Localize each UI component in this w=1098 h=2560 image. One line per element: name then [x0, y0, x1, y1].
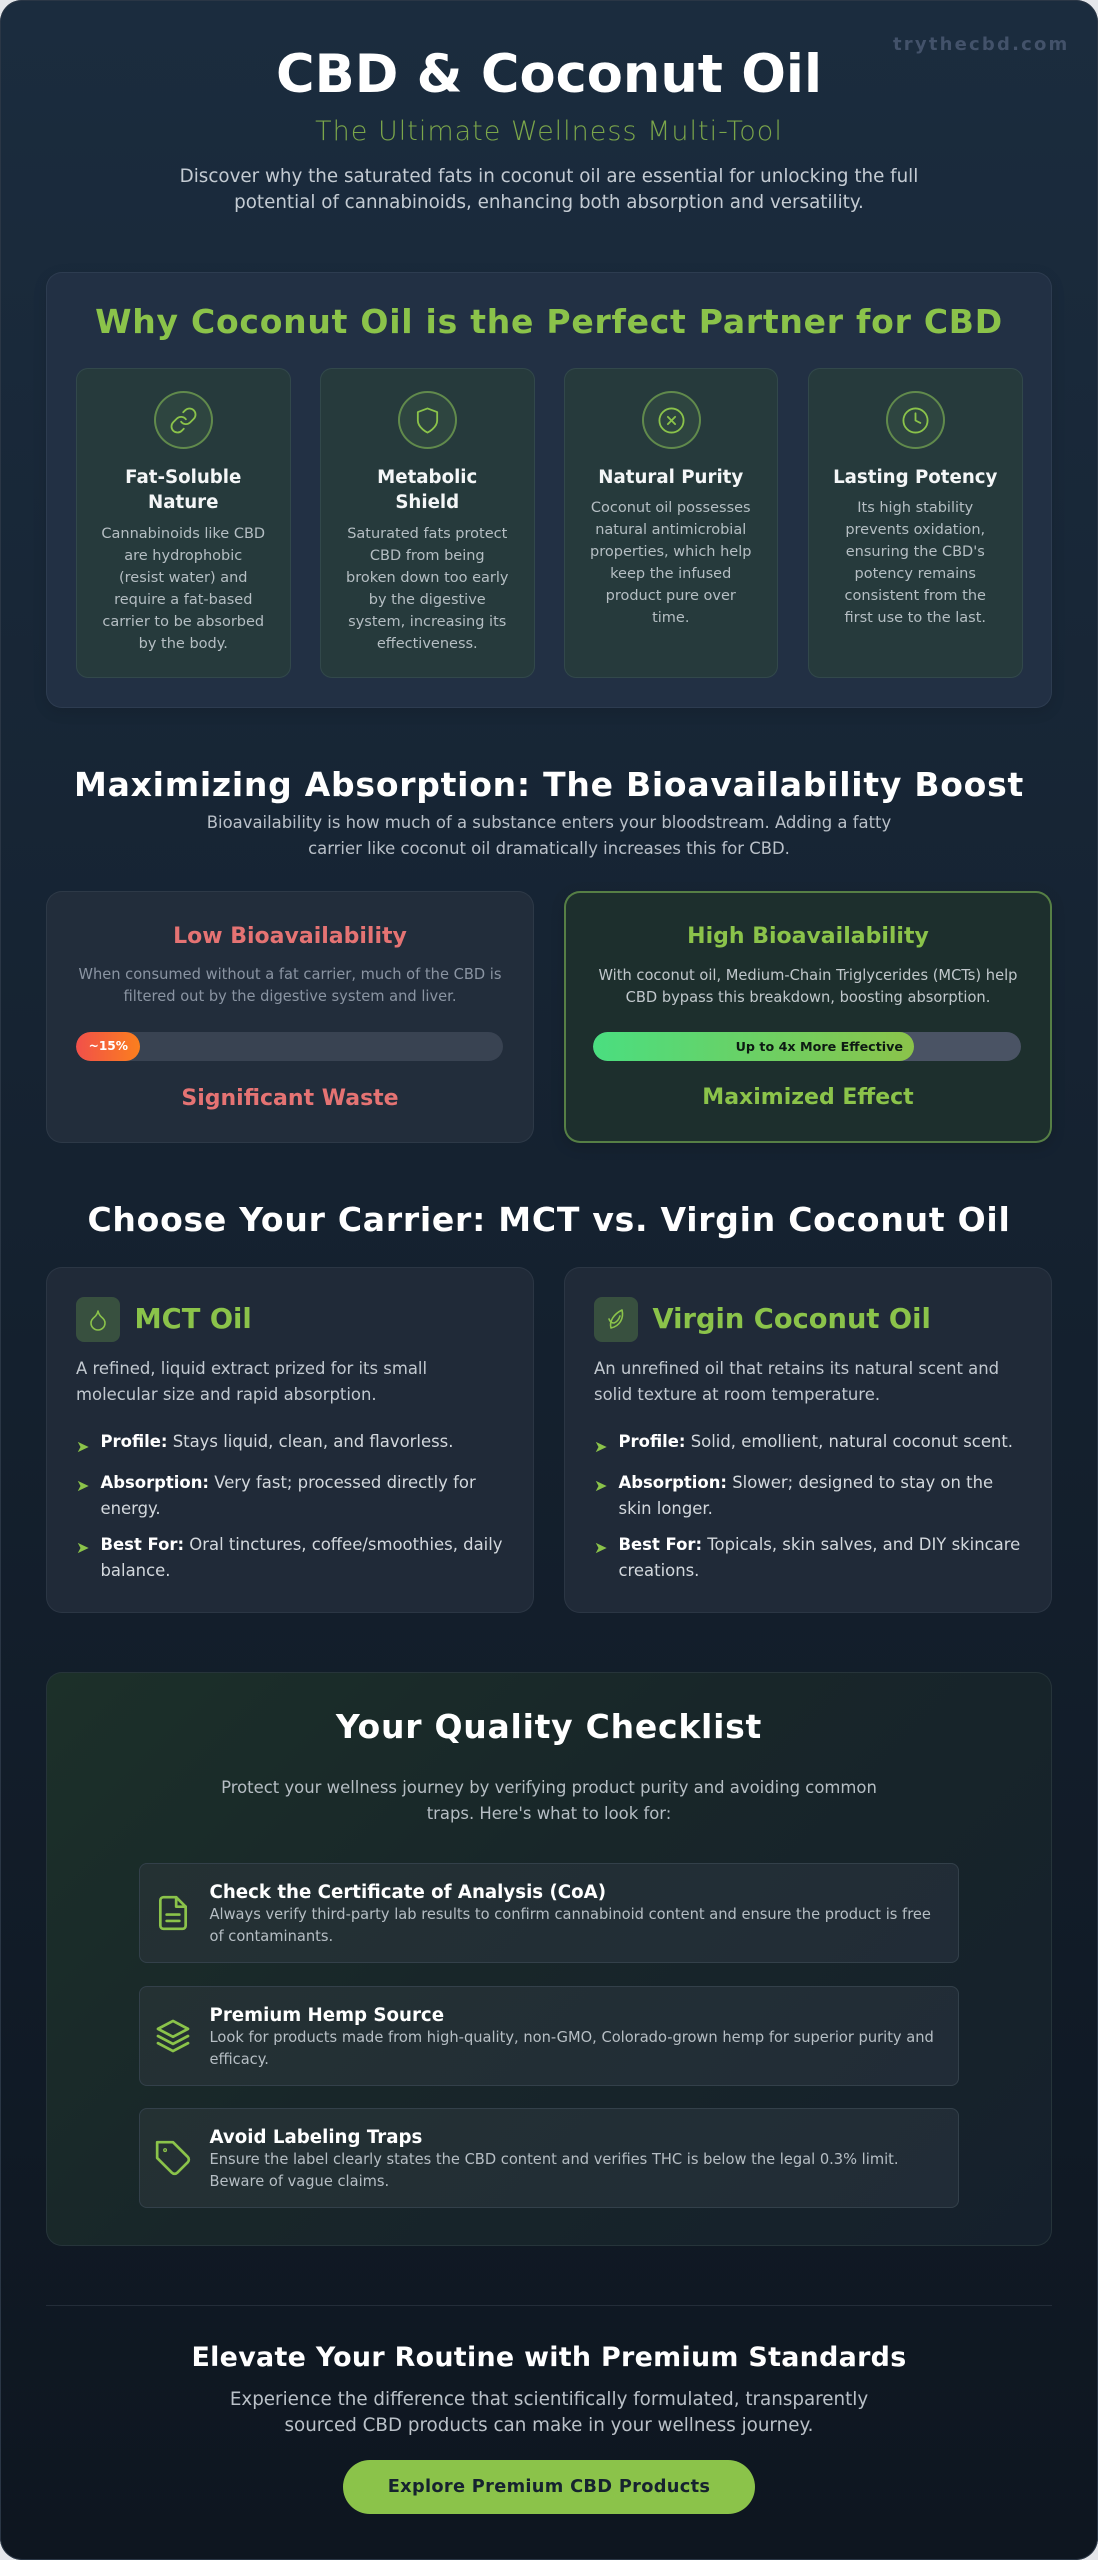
absorption row: Absorption: Slower; designed to stay on the	[618, 1473, 993, 1492]
checklist intro	[221, 1778, 877, 1823]
bioavailability intro	[207, 813, 891, 858]
panel: high bioavailability	[564, 891, 1052, 1143]
subtitle: The Ultimate Wellness Multi-Tool	[315, 116, 783, 147]
card heading: Nature	[148, 492, 218, 513]
arrow: ➤	[76, 1437, 89, 1456]
absorption row	[100, 1473, 476, 1518]
mct description: molecular size and rapid absorption.	[76, 1385, 377, 1404]
card heading	[377, 467, 477, 513]
best for row: creations.	[618, 1561, 699, 1580]
footer text	[230, 2389, 868, 2436]
button	[343, 2460, 755, 2514]
card text: prevents oxidation,	[845, 522, 985, 538]
absorption row	[618, 1473, 993, 1518]
mct description: A refined, liquid extract prized for its small	[76, 1359, 427, 1378]
card: fat-soluble nature	[76, 368, 290, 678]
card text	[101, 526, 265, 652]
heading: why coconut oil: Why Coconut Oil is the Perfect Partner for CBD	[95, 302, 1003, 340]
card text: keep the infused	[610, 566, 731, 582]
card heading: Metabolic	[377, 467, 477, 488]
item text: Beware of vague claims.	[210, 2173, 389, 2190]
best for row	[618, 1535, 1020, 1580]
card text: properties, which help	[590, 544, 751, 560]
card heading: Lasting Potency	[833, 467, 997, 488]
item text: of contaminants.	[210, 1928, 333, 1945]
item title: Premium Hemp Source	[210, 2004, 444, 2026]
title: CBD & Coconut Oil	[276, 44, 822, 105]
icon: layers	[156, 2020, 190, 2052]
card text: by the digestive	[369, 592, 486, 608]
card text: by the body.	[139, 636, 228, 652]
virgin title: Virgin Coconut Oil	[652, 1304, 931, 1335]
card text: (resist water) and	[119, 570, 248, 586]
high heading: High Bioavailability	[687, 924, 929, 949]
item: premium hemp source	[139, 1986, 959, 2086]
icon: leaf	[594, 1297, 638, 1342]
profile row: Profile: Solid, emollient, natural coconut scent.	[618, 1432, 1013, 1451]
footer call to action	[191, 2342, 907, 2514]
card text: ensuring the CBD's	[846, 544, 985, 560]
item text: efficacy.	[210, 2051, 269, 2068]
header	[180, 34, 1070, 213]
high text: CBD bypass this breakdown, boosting absorption.	[626, 989, 990, 1006]
low text: filtered out by the digestive system and liver.	[124, 988, 456, 1005]
card text: consistent from the	[845, 588, 986, 604]
bar: high 75%	[593, 1032, 1021, 1061]
arrow: ➤	[594, 1538, 607, 1557]
card heading: Shield	[395, 492, 459, 513]
virgin description: An unrefined oil that retains its natural scent and	[594, 1359, 999, 1378]
profile row: Profile: Stays liquid, clean, and flavorless.	[100, 1432, 453, 1451]
bar fill: Up to 4x More Effective	[736, 1039, 903, 1054]
watermark: trythecbd.com	[893, 34, 1070, 55]
bar fill	[593, 1032, 914, 1061]
best for row	[100, 1535, 503, 1580]
absorption row: Absorption: Very fast; processed directly for	[100, 1473, 476, 1492]
low heading: Low Bioavailability	[173, 924, 407, 948]
mct description	[76, 1359, 427, 1404]
best for row: Best For: Oral tinctures, coffee/smoothies, daily	[100, 1535, 503, 1554]
item title: Check the Certificate of Analysis (CoA)	[210, 1882, 606, 1902]
card text: Cannabinoids like CBD	[101, 526, 265, 542]
item title: Avoid Labeling Traps	[210, 2126, 422, 2148]
footer text: sourced CBD products can make in your wellness journey.	[285, 2415, 813, 2436]
icon: x circle	[642, 391, 700, 449]
item text: Ensure the label clearly states the CBD content and verifies THC is below the legal 0.3% limit.	[210, 2151, 899, 2168]
card text	[346, 526, 508, 652]
card text	[844, 500, 986, 626]
card text: Saturated fats protect	[347, 526, 507, 542]
card heading	[125, 467, 241, 513]
card text: require a fat-based	[114, 592, 252, 608]
high text: With coconut oil, Medium-Chain Triglycerides (MCTs) help	[599, 967, 1017, 984]
high result: Maximized Effect	[702, 1085, 914, 1110]
checklist intro: Protect your wellness journey by verifying product purity and avoiding common	[221, 1778, 877, 1797]
footer heading: Elevate Your Routine with Premium Standards	[191, 2342, 907, 2373]
item text	[210, 2029, 934, 2068]
card heading: Fat-Soluble	[125, 467, 241, 488]
intro text: potential of cannabinoids, enhancing both absorption and versatility.	[234, 192, 864, 213]
best for row: balance.	[100, 1561, 170, 1580]
item text: Always verify third-party lab results to confirm cannabinoid content and ensure the product is free	[210, 1906, 931, 1923]
panel: virgin coconut oil	[564, 1267, 1052, 1613]
panel: quality checklist	[46, 1672, 1052, 2246]
bar fill: ~15%	[89, 1039, 128, 1053]
best for row: Best For: Topicals, skin salves, and DIY skincare	[618, 1535, 1020, 1554]
panel: mct oil	[46, 1267, 534, 1613]
card text: effectiveness.	[377, 636, 478, 652]
icon: shield	[398, 391, 457, 449]
low result: Significant Waste	[181, 1086, 399, 1111]
item: certificate of analysis	[139, 1863, 959, 1963]
card: natural purity	[564, 368, 778, 678]
high text	[599, 967, 1017, 1006]
button: Explore Premium CBD Products	[388, 2476, 710, 2497]
item: avoid labeling traps	[139, 2108, 959, 2208]
low text	[78, 966, 502, 1005]
item text	[210, 2151, 899, 2190]
icon: document	[159, 1896, 187, 1930]
intro text	[180, 166, 918, 213]
icon: clock	[886, 391, 945, 449]
virgin description	[594, 1359, 999, 1404]
card text: time.	[652, 610, 689, 626]
icon: droplet	[76, 1297, 120, 1342]
arrow: ➤	[76, 1476, 89, 1495]
arrow: ➤	[594, 1476, 607, 1495]
absorption row: skin longer.	[618, 1499, 713, 1518]
card text: potency remains	[855, 566, 976, 582]
bar: low 15%	[76, 1032, 503, 1061]
bioavailability intro: Bioavailability is how much of a substance enters your bloodstream. Adding a fatty	[207, 813, 891, 832]
card heading: Natural Purity	[598, 467, 743, 488]
heading: carrier comparison: Choose Your Carrier: MCT vs. Virgin Coconut Oil	[87, 1200, 1011, 1239]
card: lasting potency	[808, 368, 1022, 678]
card text: are hydrophobic	[124, 548, 242, 564]
bar fill	[76, 1032, 140, 1061]
card text: natural antimicrobial	[595, 522, 746, 538]
checklist intro: traps. Here's what to look for:	[427, 1804, 671, 1823]
arrow: ➤	[76, 1538, 89, 1557]
card text: Coconut oil possesses	[591, 500, 751, 516]
item text	[210, 1906, 931, 1945]
intro text: Discover why the saturated fats in coconut oil are essential for unlocking the full	[180, 166, 918, 187]
panel: why coconut oil	[46, 272, 1052, 708]
mct title: MCT Oil	[134, 1304, 252, 1335]
card text	[590, 500, 751, 626]
card text: broken down too early	[346, 570, 508, 586]
absorption row: energy.	[100, 1499, 161, 1518]
card text: Its high stability	[857, 500, 973, 516]
card text: carrier to be absorbed	[102, 614, 264, 630]
icon: tag	[156, 2140, 190, 2176]
heading: bioavailability: Maximizing Absorption: The Bioavailability Boost	[74, 765, 1024, 804]
item text: Look for products made from high-quality, non-GMO, Colorado-grown hemp for superior purity and	[210, 2029, 934, 2046]
icon: link	[154, 391, 213, 449]
card text: product pure over	[606, 588, 736, 604]
footer text: Experience the difference that scientifically formulated, transparently	[230, 2389, 868, 2410]
arrow: ➤	[594, 1437, 607, 1456]
card text: system, increasing its	[348, 614, 506, 630]
virgin description: solid texture at room temperature.	[594, 1385, 880, 1404]
card text: first use to the last.	[844, 610, 986, 626]
panel: low bioavailability	[46, 891, 534, 1143]
card text: CBD from being	[370, 548, 485, 564]
card: metabolic shield	[320, 368, 534, 678]
checklist heading: Your Quality Checklist	[336, 1707, 762, 1746]
low text: When consumed without a fat carrier, much of the CBD is	[78, 966, 502, 983]
bioavailability intro: carrier like coconut oil dramatically increases this for CBD.	[308, 839, 790, 858]
